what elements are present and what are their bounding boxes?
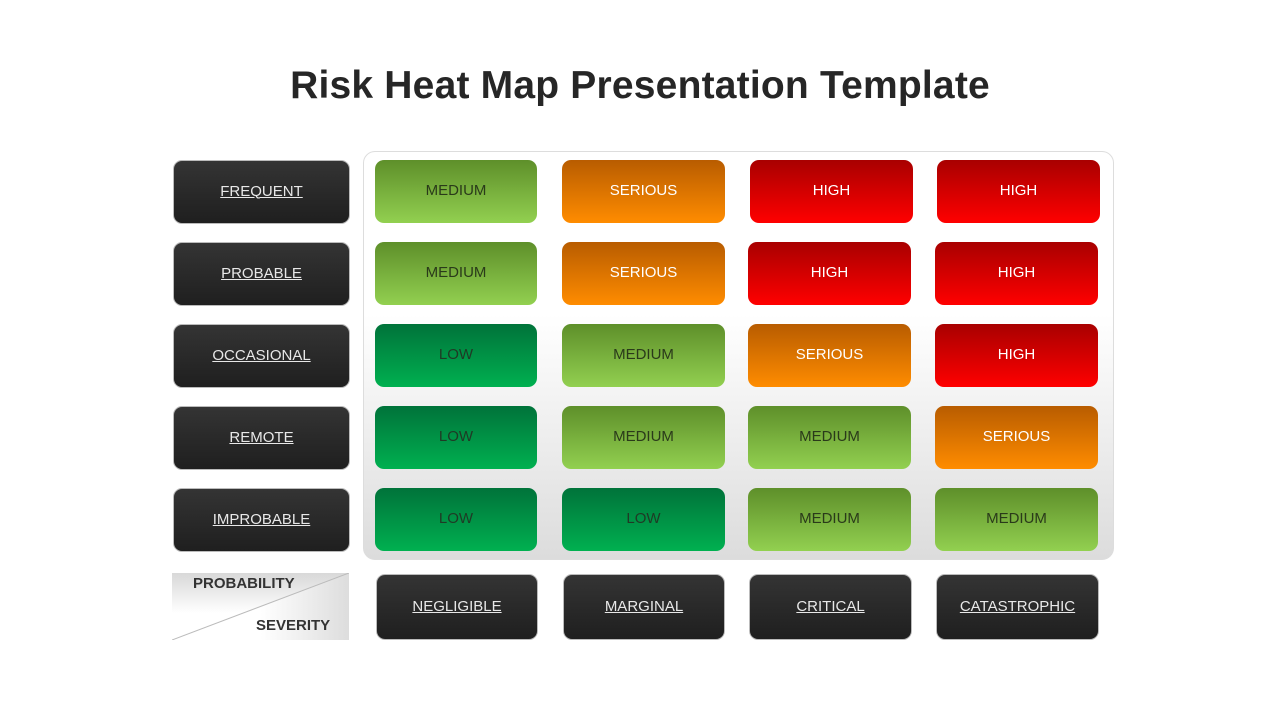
- panel: heat map grid: HIGH: [813, 182, 850, 199]
- panel: heat map grid: MEDIUM: [986, 510, 1047, 527]
- row 4: LOW: [439, 428, 473, 445]
- row 5: [375, 488, 537, 551]
- panel: heat map grid: MEDIUM: [799, 510, 860, 527]
- row 3: LOW: [439, 346, 473, 363]
- axis corner: probability / severity: [172, 573, 349, 640]
- axis corner: probability / severity: SEVERITY: [256, 617, 330, 634]
- row 2: [375, 242, 537, 305]
- probability labels: IMPROBABLE: [213, 510, 310, 528]
- panel: heat map grid: SERIOUS: [983, 428, 1050, 445]
- panel: heat map grid: SERIOUS: [610, 264, 677, 281]
- probability labels: REMOTE: [229, 428, 294, 446]
- severity labels: NEGLIGIBLE: [412, 598, 502, 614]
- row 2: MEDIUM: [426, 264, 486, 281]
- row 4: [375, 406, 537, 469]
- panel: heat map grid: HIGH: [1000, 182, 1037, 199]
- axis corner: probability / severity: PROBABILITY: [193, 575, 295, 592]
- panel: heat map grid: LOW: [626, 510, 661, 527]
- probability labels: OCCASIONAL: [212, 346, 311, 364]
- probability labels: [173, 160, 350, 552]
- panel: heat map grid: HIGH: [998, 264, 1035, 281]
- probability labels: PROBABLE: [221, 264, 302, 282]
- row 1: [375, 160, 537, 223]
- row 3: [375, 324, 537, 387]
- title: Risk Heat Map Presentation Template: [290, 64, 990, 107]
- severity labels: CATASTROPHIC: [960, 598, 1075, 614]
- severity labels: MARGINAL: [605, 598, 683, 614]
- panel: heat map grid: MEDIUM: [613, 346, 674, 363]
- severity labels: CRITICAL: [796, 598, 865, 614]
- panel: heat map grid: SERIOUS: [796, 346, 863, 363]
- panel: heat map grid: MEDIUM: [613, 428, 674, 445]
- row 1: MEDIUM: [426, 182, 486, 199]
- panel: heat map grid: HIGH: [811, 264, 848, 281]
- panel: heat map grid: HIGH: [998, 346, 1035, 363]
- panel: heat map grid: [363, 151, 1114, 560]
- panel: heat map grid: SERIOUS: [610, 182, 677, 199]
- panel: heat map grid: MEDIUM: [799, 428, 860, 445]
- probability labels: FREQUENT: [220, 182, 303, 200]
- row 5: LOW: [439, 510, 473, 527]
- severity labels: [376, 574, 1099, 640]
